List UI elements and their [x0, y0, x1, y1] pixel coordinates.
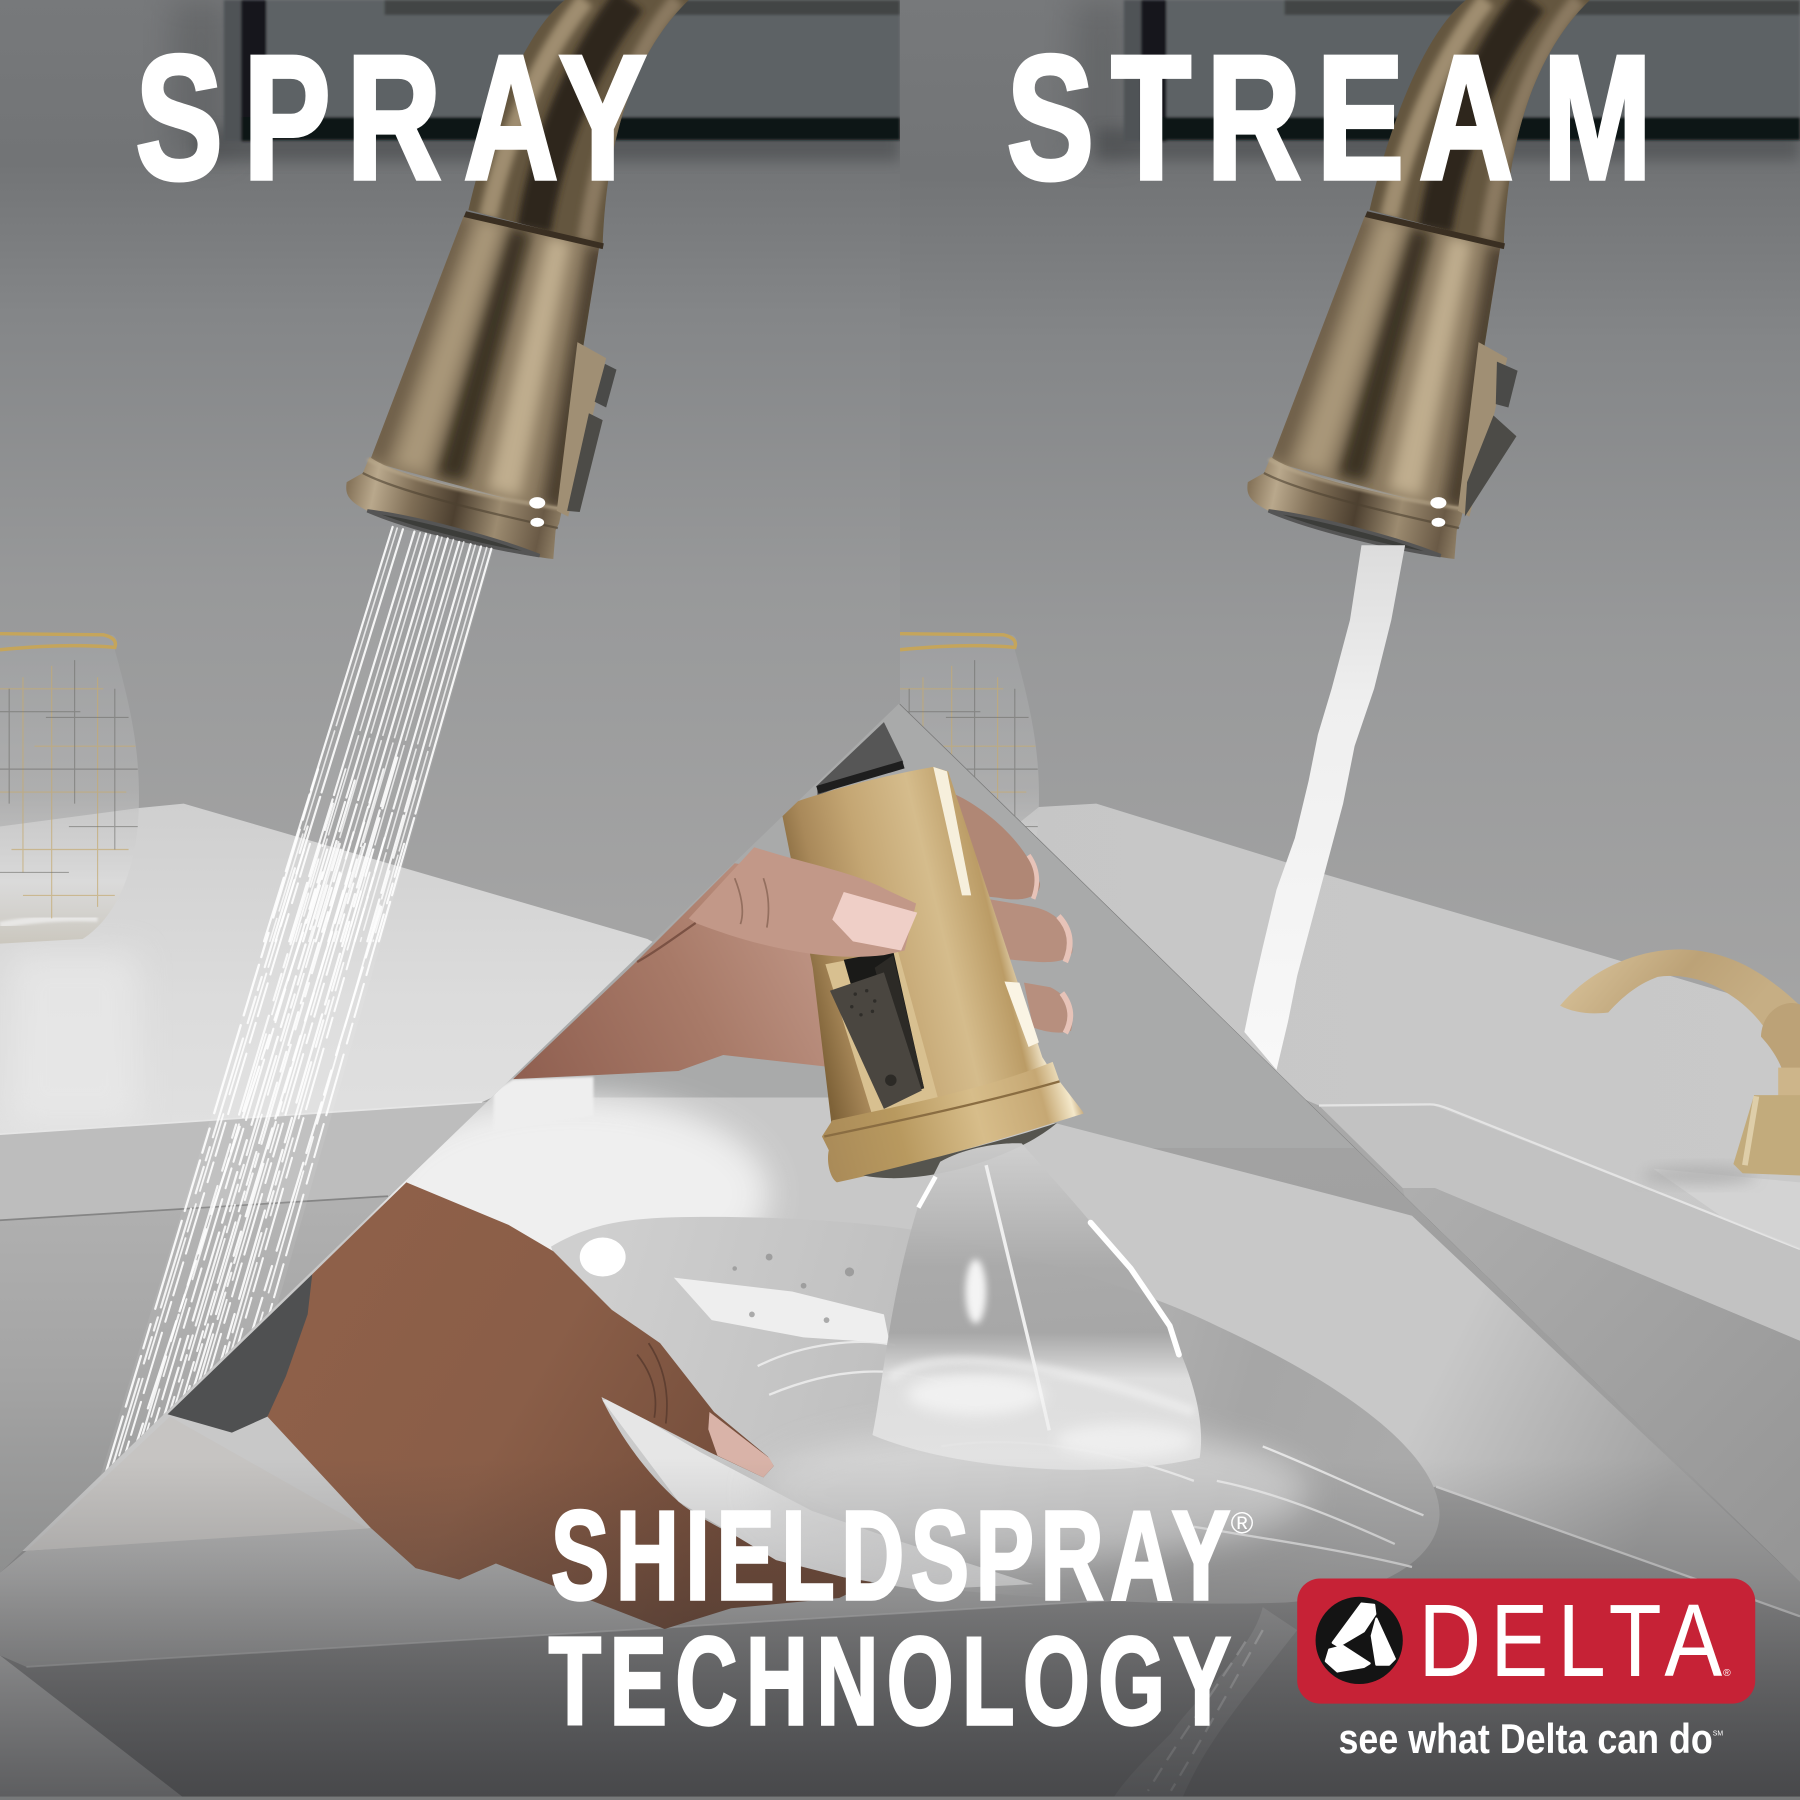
- index finger and nail: [637, 847, 917, 962]
- heading: shieldspray technology: SHIELDSPRAY: [551, 1485, 1237, 1626]
- panel: stream: [900, 0, 1800, 1607]
- panel: spray: [0, 0, 900, 1642]
- tagline: SM: [1713, 1731, 1723, 1738]
- heading: shieldspray technology: TECHNOLOGY: [549, 1612, 1239, 1751]
- heading: spray: SPRAY: [135, 18, 646, 216]
- drinking glass: [900, 632, 1039, 837]
- spray head faucet: [346, 0, 689, 559]
- spray water: [95, 527, 494, 1492]
- heading: stream: STREAM: [1007, 18, 1652, 216]
- icon: delta emblem: [1316, 1597, 1403, 1684]
- panel: shieldspray: [0, 689, 1800, 1800]
- heading: shieldspray technology: [549, 1485, 1254, 1751]
- water cone: [872, 1143, 1201, 1470]
- delta logo badge: [1297, 1578, 1755, 1704]
- small brass soap dispenser: [1560, 949, 1800, 1176]
- stream head faucet: [1247, 0, 1590, 559]
- falling splash: [1147, 1608, 1297, 1792]
- delta logo badge: ®: [1723, 1668, 1731, 1679]
- dish plate: [551, 1217, 1440, 1604]
- tagline: see what Delta can do: [1339, 1716, 1713, 1762]
- lower hand behind plate: [168, 1182, 872, 1629]
- sprayer head: [781, 722, 1084, 1182]
- thumb over plate: [406, 1182, 774, 1478]
- back fingers holding sprayer: [955, 794, 1072, 1033]
- delta logo badge: DELTA: [1418, 1584, 1732, 1699]
- heading: shieldspray technology: ®: [1231, 1506, 1254, 1541]
- stream of water: [1244, 545, 1405, 1070]
- upper hand: [513, 863, 825, 1079]
- drinking glass: [0, 634, 139, 944]
